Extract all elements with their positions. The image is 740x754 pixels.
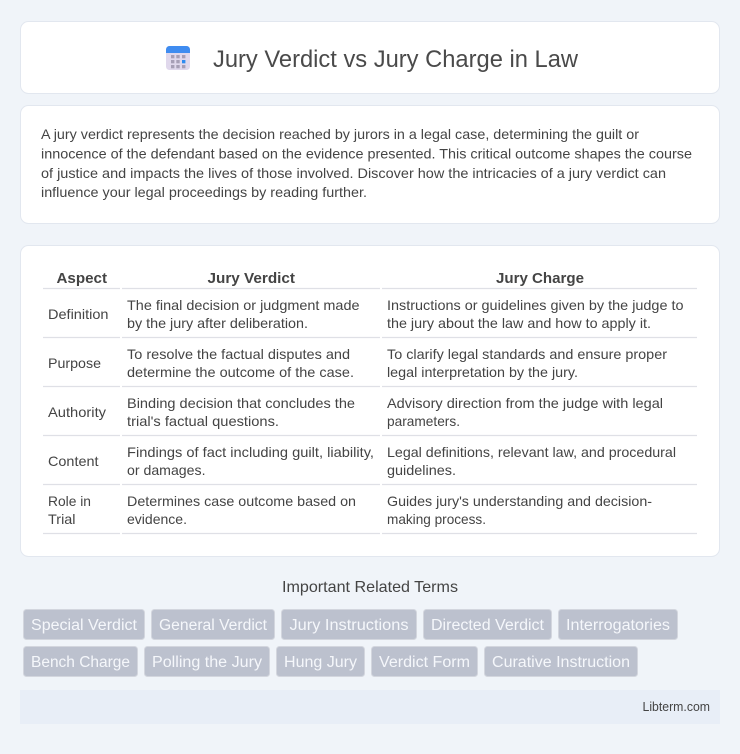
row: Content: Content — [48, 453, 99, 469]
related term tags: Curative Instruction — [492, 654, 630, 671]
row: Role in Trial: Role in — [48, 493, 91, 509]
row: Content: Findings of fact including guilt, liability, — [127, 444, 374, 460]
row: Authority: trial's factual questions. — [127, 413, 279, 429]
row: Definition: the jury about the law and how to apply it. — [387, 315, 651, 331]
intro paragraph: influence your legal proceedings by reading further. — [41, 184, 367, 200]
panel: introduction — [20, 106, 720, 224]
row: Definition: Instructions or guidelines given by the judge to — [387, 297, 684, 313]
related term tags — [24, 610, 678, 676]
intro paragraph: of justice and impacts the lives of those involved. Discover how the intricacies of a jury verdict can — [41, 165, 666, 181]
intro paragraph — [41, 126, 692, 200]
table header: Jury Charge — [496, 271, 584, 287]
row: Content: guidelines. — [387, 462, 456, 478]
row: Definition — [48, 297, 684, 331]
row: Role in Trial: evidence. — [127, 511, 187, 527]
row: Role in Trial: making process. — [387, 511, 486, 527]
title: Jury Verdict vs Jury Charge in Law — [213, 46, 579, 73]
related term tags: Hung Jury — [284, 654, 357, 671]
row: Definition: The final decision or judgment made — [127, 297, 360, 313]
row: Authority: Authority — [48, 404, 106, 420]
table header — [56, 271, 584, 287]
heading: important related terms: Important Related Terms — [282, 579, 458, 596]
footer bar: Libterm.com — [642, 700, 710, 714]
related term tags: Directed Verdict — [431, 617, 545, 634]
row: Authority: parameters. — [387, 413, 460, 429]
row: Authority — [48, 395, 663, 429]
row: Role in Trial: Determines case outcome based on — [127, 493, 356, 509]
related term tags: Interrogatories — [566, 617, 670, 634]
row: Purpose: legal interpretation by the jury. — [387, 364, 578, 380]
row: Definition: Definition — [48, 306, 108, 322]
footer bar — [20, 690, 720, 724]
icon: calendar — [166, 46, 190, 70]
related term tags: Bench Charge — [31, 654, 130, 671]
header panel — [20, 22, 720, 94]
intro paragraph: innocence of the defendant based on the evidence presented. This critical outcome shapes the course — [41, 146, 692, 162]
row: Authority: Binding decision that concludes the — [127, 395, 355, 411]
row: Content — [48, 444, 676, 478]
row: Role in Trial: Guides jury's understanding and decision- — [387, 493, 652, 509]
panel: comparison table — [20, 246, 720, 556]
row: Role in Trial — [48, 493, 652, 527]
row: Content: or damages. — [127, 462, 206, 478]
row: Purpose — [48, 346, 667, 380]
related term tags: Special Verdict — [31, 617, 138, 634]
row: Purpose: To clarify legal standards and ensure proper — [387, 346, 667, 362]
intro paragraph: A jury verdict represents the decision reached by jurors in a legal case, determining the guilt or — [41, 126, 639, 142]
row: Content: Legal definitions, relevant law, and procedural — [387, 444, 676, 460]
related term tags: Verdict Form — [379, 654, 470, 671]
row: Purpose: Purpose — [48, 355, 101, 371]
row: Authority: Advisory direction from the judge with legal — [387, 395, 663, 411]
related term tags: General Verdict — [159, 617, 268, 634]
related term tags: Jury Instructions — [290, 617, 409, 634]
table header: Jury Verdict — [208, 271, 295, 287]
table header: Aspect — [56, 271, 107, 287]
related term tags: Polling the Jury — [152, 654, 262, 671]
row: Purpose: To resolve the factual disputes and — [127, 346, 350, 362]
row: Role in Trial: Trial — [48, 511, 76, 527]
row: Definition: by the jury after deliberation. — [127, 315, 308, 331]
row: Purpose: determine the outcome of the case. — [127, 364, 354, 380]
